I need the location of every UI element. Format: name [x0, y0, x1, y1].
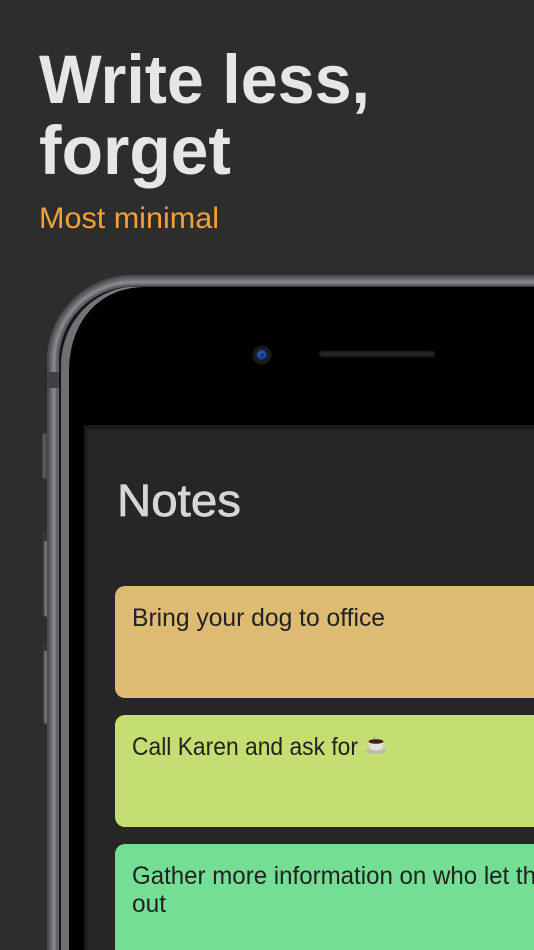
- heading: forget: [39, 112, 231, 189]
- note card: Karen: Call Karen and ask for: [132, 733, 358, 761]
- phone face: [69, 287, 534, 950]
- screen: [84, 425, 534, 950]
- side buttons: [42, 433, 48, 724]
- inner light rim: [61, 287, 534, 950]
- note card: gather: [115, 844, 534, 950]
- heading: Write less,: [39, 41, 370, 118]
- note card: Karen: [115, 715, 534, 827]
- note card: gather: out: [132, 890, 166, 918]
- note card: dog: [115, 586, 534, 698]
- heading: [39, 41, 370, 189]
- phone mockup: [42, 276, 534, 950]
- subtitle: Most minimal: [39, 202, 219, 235]
- phone outer frame: [47, 276, 534, 950]
- dark inner groove: [59, 286, 534, 950]
- screen title: Notes: [117, 475, 241, 526]
- front camera: [252, 346, 272, 364]
- note card: dog: Bring your dog to office: [132, 604, 385, 632]
- icon: coffee cup: [366, 736, 387, 754]
- speaker: [319, 351, 435, 357]
